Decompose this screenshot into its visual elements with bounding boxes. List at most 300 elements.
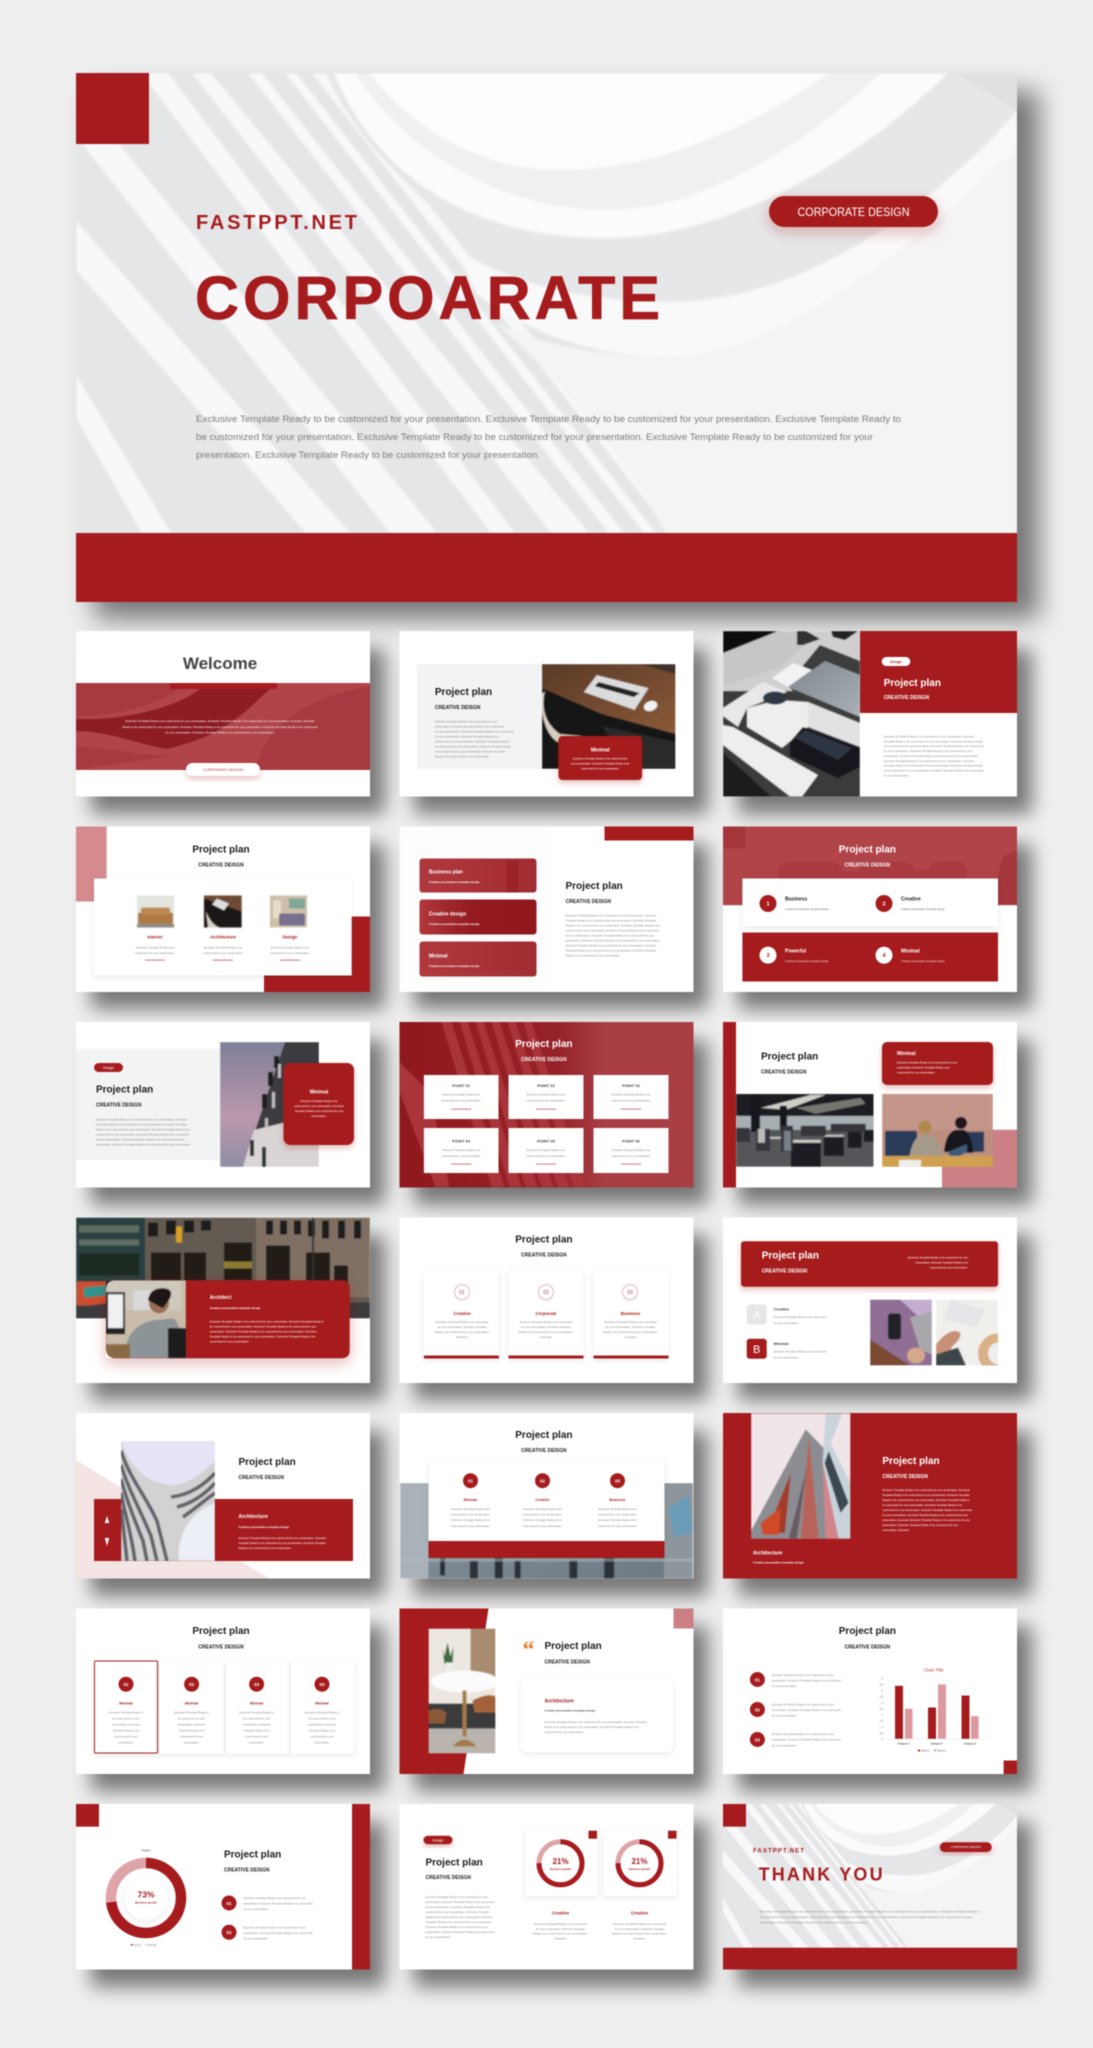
heading [426, 1857, 483, 1881]
pill button [769, 196, 938, 227]
grey panel [417, 664, 542, 769]
body text: Exclusive Template Ready to be customized for your presentation. Exclusive [96, 1118, 187, 1122]
grey panel [76, 1049, 220, 1160]
item 3 [760, 947, 829, 964]
slide: project plan with laptop photo [399, 630, 694, 798]
column: business: Exclusive Template Ready to be customized [604, 1320, 657, 1324]
column: architecture [203, 934, 243, 961]
donut chart: 2nd Qtr [148, 1944, 157, 1947]
red card [742, 932, 998, 982]
caption 2: Exclusive [634, 1937, 646, 1941]
column: minimal [451, 1473, 491, 1528]
card 01: presentation. [118, 1740, 134, 1744]
point 03: POINT 03 [622, 1083, 641, 1088]
heading: Project plan [426, 1857, 483, 1868]
body text: to be customized for your presentation. Exclusive Template Ready to be customized [884, 744, 984, 748]
caption [753, 1551, 804, 1564]
heading: Project plan [96, 1085, 153, 1096]
category labels: Category 3 [964, 1742, 977, 1746]
body text: Template Ready to be customized for your presentation. Exclusive Template [882, 1493, 970, 1497]
card 01: be customized for your [112, 1716, 140, 1720]
point 03: customized for your presentation. [611, 1098, 651, 1102]
bar chart: 0 [882, 1738, 884, 1741]
red side bar [723, 1022, 736, 1188]
column: corporate: for your presentation. Exclusive Template [521, 1325, 571, 1329]
photo band [76, 683, 370, 770]
body text: Template Ready to be customized for your presentation. Exclusive Template [566, 948, 656, 952]
brand label: FASTPPT.NET [196, 212, 357, 234]
item 2: Creative presentation template design [901, 907, 945, 911]
heading [96, 1085, 153, 1109]
description text [760, 1910, 980, 1925]
body text: Ready to be customized for your presentation. Exclusive [426, 1915, 493, 1919]
slide: three circles over glass building [399, 1412, 694, 1579]
column: business: Exclusive [625, 1335, 637, 1339]
photo: two women meeting [881, 1093, 994, 1168]
thumbnail slide shadows [91, 649, 1032, 1987]
body text [884, 734, 984, 778]
body text: be customized for your presentation. Exclusive Template Ready [435, 744, 511, 748]
card: business plan: Business plan [429, 870, 463, 876]
heading [435, 687, 492, 711]
arrows [105, 1516, 109, 1546]
bar chart: 2 [882, 1714, 884, 1717]
point 05: POINT 05 [537, 1138, 556, 1144]
callout card: customized for your presentation. [897, 1070, 936, 1074]
card 03: Template Ready to be [244, 1728, 270, 1732]
red banner: Project plan [762, 1250, 819, 1262]
slide: welcome [75, 630, 371, 798]
heading: Project plan [884, 678, 941, 689]
description text: presentation. Exclusive Template Ready to be customized for your presentation. [196, 450, 540, 461]
photo: curved building [120, 1441, 216, 1562]
heading: CREATIVE DEISGN [566, 899, 611, 905]
heading [839, 844, 896, 868]
callout card: Exclusive Template Ready to be [301, 1099, 338, 1103]
point 06 [594, 1128, 668, 1173]
card: business plan: Creative presentation template design [429, 880, 480, 884]
heading [192, 1626, 250, 1650]
slide: project plan with devices photo [722, 630, 1018, 798]
heading: CREATIVE DEISGN [238, 1475, 284, 1481]
band text: Architecture [238, 1514, 268, 1520]
column: creative: customized for your presentation. [523, 1524, 563, 1528]
card 03: be customized for your [243, 1716, 270, 1720]
photo: devices flat lay [722, 630, 861, 798]
item b: Exclusive Template Ready to be customized [774, 1349, 827, 1353]
main title: CORPOARATE [195, 264, 660, 332]
tag pill [94, 1063, 123, 1072]
red tab [170, 683, 277, 689]
body text: Exclusive Template Ready to be customized for your [435, 720, 497, 724]
white card [742, 878, 998, 926]
tag pill: Design [890, 660, 902, 664]
series 1 bars [895, 1686, 970, 1739]
body text: customized for your presentation. Exclusive Template Ready to be customized [882, 1508, 973, 1512]
description text: Exclusive Template Ready to be customized for your presentation. Exclusive Template Ready to be customized for your presentation. Exclusive Template Ready to [760, 1910, 980, 1914]
bar chart: Chart Title [924, 1668, 944, 1672]
photo: laptop and coffee [869, 1299, 932, 1366]
body text: presentation. Exclusive Template Ready to be customized [426, 1930, 495, 1934]
column: business: Ready to be customized for your presentation. [603, 1330, 658, 1334]
point 01 [424, 1075, 498, 1119]
heading [884, 678, 941, 701]
card 04: presentation. Exclusive [308, 1722, 336, 1726]
slide: red with tower photo [722, 1412, 1018, 1580]
body text: presentation. Exclusive [882, 1528, 910, 1532]
column: interior: customized for your presentation. [135, 951, 175, 955]
card: creative design [420, 900, 536, 934]
tag pill [424, 1836, 452, 1844]
white card [94, 878, 352, 976]
welcome text: Ready to be customized for your presentation. Exclusive Template Ready to be customized for your presentation. Exclusive Template Ready to be customized [122, 725, 318, 729]
donut chart: 73% [137, 1890, 155, 1900]
item 1: Creative presentation template design [785, 907, 829, 911]
item b: for your presentation. [774, 1356, 799, 1360]
caption 2: Creative [631, 1910, 649, 1915]
welcome text: Exclusive Template Ready to be customized for your presentation. Exclusive Template Ready to be customized for your presentation. Exclusive Template [125, 719, 315, 723]
body text: presentation. Exclusive Template Ready to be customized for your presentation. [96, 1142, 191, 1146]
red card with photo: Template Ready to be customized for your presentation. Exclusive Template Ready to be [210, 1334, 316, 1338]
item 2 [876, 895, 945, 912]
point 02: 02 [226, 1930, 232, 1935]
caption 2 [612, 1910, 667, 1941]
bar chart [880, 1668, 988, 1752]
column: creative: Exclusive [456, 1335, 468, 1339]
pink corner block [942, 1130, 1017, 1188]
bar chart: 4 [882, 1690, 884, 1692]
column: business [598, 1473, 638, 1528]
point 01: for your presentation. [244, 1907, 269, 1911]
heading: CREATIVE DEISGN [96, 1103, 142, 1109]
column: architecture: Exclusive Template Ready to be [204, 946, 243, 950]
column: design: customized for your presentation. [270, 951, 310, 955]
card: minimal: Creative presentation template design [429, 964, 480, 968]
body text [566, 914, 661, 958]
item a: A [753, 1310, 761, 1322]
photo: table and chairs [428, 1628, 496, 1754]
card: minimal [420, 942, 536, 976]
heading [515, 1234, 573, 1258]
white card: Creative presentation template design [544, 1708, 595, 1712]
slide: office photos [722, 1021, 1018, 1188]
item 4: Creative presentation template design [901, 959, 945, 963]
point 05: Exclusive Template Ready to be [527, 1148, 566, 1152]
white card: Ready to be customized for your presentation. Exclusive Template Ready to be [544, 1725, 639, 1729]
point 03: 03 [755, 1737, 760, 1742]
point 06: Exclusive Template Ready to be [612, 1148, 651, 1152]
card 03: presentation. [249, 1740, 265, 1744]
heading: Project plan [761, 1052, 818, 1063]
point 01: 01 [226, 1901, 232, 1906]
body text: for your presentation. Exclusive Template Ready to be customized for your [566, 934, 654, 938]
point 01: for your presentation. [772, 1684, 797, 1688]
point 03: for your presentation. [772, 1743, 797, 1747]
card 02: Exclusive Template Ready to [174, 1710, 209, 1714]
column: corporate: Ready to be customized for your presentation. [519, 1330, 574, 1334]
heading: Project plan [839, 1626, 896, 1637]
card 01: Template Ready to be [113, 1728, 140, 1732]
category labels: Category 1 [897, 1742, 910, 1746]
white card [428, 1460, 664, 1541]
item 2: Creative [901, 896, 921, 902]
slide: building photo with card [76, 1022, 371, 1188]
point 04: Exclusive Template Ready to be [442, 1148, 481, 1152]
card 03: customized for your [245, 1734, 268, 1738]
point 02 [222, 1925, 313, 1941]
red card with photo: customized for your presentation. [210, 1340, 250, 1344]
red panel [860, 631, 1017, 713]
body text: for your presentation. Exclusive Template Ready to be customized for your [882, 1513, 968, 1517]
point 04: customized for your presentation. [441, 1154, 481, 1158]
slide: quote with table photo [398, 1608, 694, 1775]
caption 1: Creative [552, 1910, 570, 1915]
card: donut 1: 21% [552, 1857, 569, 1866]
card: donut 2 [604, 1831, 676, 1896]
point 02: Exclusive Template Ready to be customized for your [772, 1702, 834, 1706]
column: corporate: Corporate [536, 1311, 557, 1316]
caption: Architecture [753, 1551, 783, 1557]
body text: Exclusive Template Ready to be customized for your [426, 1895, 488, 1899]
heading: CREATIVE DEISGN [198, 862, 244, 868]
red card with photo: Creative presentation template design [210, 1306, 261, 1310]
card 04: customized for your [310, 1734, 334, 1738]
body text: for your presentation. Exclusive Template Ready to be customized for your [96, 1138, 185, 1142]
pill button: CORPORATE DESIGN [951, 1845, 981, 1849]
callout card: customized for your presentation. [581, 767, 620, 771]
heading: CREATIVE DEISGN [845, 862, 891, 868]
column: business: Business [621, 1311, 641, 1316]
red banner: customized for your presentation. [930, 1266, 968, 1270]
heading [192, 844, 250, 868]
legend: Series 2 [937, 1750, 946, 1752]
caption 1: for your presentation. Exclusive Template [536, 1927, 586, 1931]
body text [435, 720, 514, 758]
point 01: Exclusive Template Ready to be customized for your [244, 1896, 306, 1900]
caption 2: Exclusive Template Ready to be customized [613, 1922, 666, 1926]
heading [515, 1039, 573, 1063]
slide: red banner with a/b items [722, 1217, 1018, 1384]
body text: for your presentation. Exclusive Template Ready to be customized [435, 730, 514, 734]
title: Welcome [183, 654, 257, 673]
body text: be customized for your presentation. Exclusive Template Ready to be [882, 1503, 962, 1507]
welcome text [122, 719, 318, 734]
body text: for your presentation. [426, 1935, 451, 1939]
red corner [723, 1804, 746, 1827]
body text: Ready to be customized for your presentation. [435, 754, 490, 758]
white card [520, 1678, 674, 1752]
card 02: Minimal [185, 1702, 198, 1706]
slide: architecture building photo [76, 1412, 371, 1580]
bar chart: 0.5 [880, 1732, 884, 1735]
body text: Exclusive Template Ready to be customized for your presentation. Exclusive [566, 944, 657, 948]
body text: Template Ready to be customized for your presentation. Exclusive Template Ready [884, 739, 983, 743]
column: creative: Creative [453, 1311, 471, 1316]
column: design: Design [283, 934, 298, 940]
heading: CREATIVE DEISGN [435, 705, 481, 711]
callout card: Exclusive Template Ready to be customized for [573, 757, 628, 761]
photo: sofa [137, 896, 174, 928]
red shape [400, 1608, 488, 1774]
column: business: customized for your presentation. [598, 1513, 638, 1517]
column: minimal: customized for your presentation. [451, 1513, 491, 1517]
item 1 [760, 895, 829, 912]
left shaded panel [400, 826, 550, 992]
red background with stripes [400, 1022, 694, 1188]
heading [566, 881, 623, 905]
body text: Ready to be customized for your presentation. Exclusive Template Ready to be [96, 1128, 190, 1132]
point 02: presentation. Exclusive Template Ready to be customized [772, 1708, 841, 1712]
point 03 [750, 1732, 841, 1747]
category labels: Category 2 [931, 1742, 944, 1746]
caption 2: for your presentation. Exclusive Template [615, 1927, 665, 1931]
heading [544, 1641, 602, 1666]
point 02 [508, 1075, 584, 1119]
heading: Project plan [515, 1039, 573, 1050]
body text: presentation. Exclusive Template Ready to be customized for your [882, 1523, 958, 1527]
red card with photo: Exclusive Template Ready to be customized for your presentation. Exclusive Template Ready to [210, 1320, 324, 1324]
slide: six point grid [398, 1021, 694, 1188]
legend [918, 1750, 946, 1752]
photo: man at desk [105, 1280, 187, 1359]
card 04: presentation. [314, 1740, 330, 1744]
item 3: 3 [766, 953, 770, 959]
heading: Project plan [839, 844, 896, 856]
brand label: FASTPPT.NET [753, 1848, 804, 1855]
column: minimal: Minimal [464, 1498, 477, 1502]
tag pill [882, 657, 910, 666]
card: donut 1: Business growth [550, 1867, 571, 1871]
card 01 [94, 1661, 158, 1753]
card 04 [291, 1660, 354, 1754]
heading [761, 1052, 818, 1076]
point 01: customized for your presentation. [441, 1098, 481, 1102]
card 02: be customized for your [178, 1716, 205, 1720]
body text: Exclusive Template Ready to be customized for your [426, 1925, 488, 1929]
body text: Template Ready to be customized for your presentation. Exclusive Template [96, 1122, 187, 1126]
caption 2: Ready to be customized for your presentation. [612, 1932, 667, 1936]
column: corporate: Exclusive Template Ready to be customized [520, 1320, 573, 1324]
card: creative design: Creative presentation template design [429, 922, 480, 926]
body text: Ready to be customized for your presentation. Exclusive Template Ready to be [566, 924, 660, 928]
band text: Exclusive Template Ready to be customized for your presentation. Exclusive [238, 1536, 327, 1540]
card: donut 2: 21% [631, 1857, 648, 1866]
bar chart: 5 [882, 1678, 884, 1680]
footer bar [76, 533, 1017, 602]
heading: Project plan [192, 1626, 250, 1637]
red background [723, 1413, 1017, 1578]
body text [96, 1118, 191, 1146]
card 03: Exclusive Template Ready to [239, 1710, 274, 1714]
column: creative [424, 1272, 499, 1358]
column: business: Exclusive Template Ready to be [598, 1507, 637, 1511]
description text: Exclusive Template Ready to be customized for your presentation. Exclusive Template Ready to be customized for your presentation. Exclusive Template Ready to [196, 414, 901, 425]
column: business: Business [610, 1498, 625, 1502]
bar chart: 3 [882, 1702, 884, 1705]
body text: for your presentation. Exclusive Template Ready to be customized for your [884, 749, 972, 753]
card 02: presentation. Exclusive [178, 1722, 206, 1726]
callout card: customized for your presentation. Exclusive [294, 1104, 345, 1108]
column: business: for your presentation. Exclusive Template [606, 1325, 656, 1329]
point 01: Exclusive Template Ready to be customized for your [772, 1673, 834, 1677]
callout card: presentation. [312, 1114, 327, 1118]
body text: customized for your presentation. Exclusive Template Ready to [435, 740, 510, 744]
point 01 [750, 1672, 841, 1688]
photo: interior [270, 896, 307, 928]
bar chart: 4.5 [880, 1684, 884, 1686]
callout card: Minimal [897, 1051, 916, 1057]
card 03: presentation. Exclusive [243, 1722, 271, 1726]
red corner [1004, 1760, 1017, 1774]
item a [747, 1304, 827, 1325]
closing title: THANK YOU [759, 1864, 883, 1884]
body text: for your presentation. Exclusive Template Ready to be [426, 1905, 490, 1909]
pink corner bar [76, 826, 107, 902]
photo: hands and hat [935, 1300, 999, 1366]
column: creative: 02 [540, 1478, 545, 1484]
card 04: Template Ready to be [309, 1728, 336, 1732]
body text: presentation. Exclusive Template Ready to be customized for your presentation. [884, 754, 979, 758]
card 02: Template Ready to be [179, 1728, 205, 1732]
card 01: Exclusive Template Ready to [109, 1710, 144, 1714]
white card: Architecture [544, 1698, 574, 1704]
footer bar [723, 1948, 1017, 1970]
item a: Exclusive Template Ready to be customized [774, 1315, 827, 1319]
heading: Project plan [435, 687, 492, 698]
description text: be customized for your presentation. Exclusive Template Ready to be customized for your presentation. Exclusive Template Ready to be customized for your [196, 432, 874, 443]
description text: presentation. Exclusive Template Ready to be customized for your presentation. [760, 1921, 868, 1925]
item b: B [753, 1344, 760, 1356]
point 01: Exclusive Template Ready to be [442, 1092, 481, 1096]
point 06: POINT 06 [622, 1138, 641, 1144]
heading [238, 1457, 296, 1481]
bar chart: 2.5 [880, 1708, 884, 1711]
column: creative: for your presentation. Exclusive Template [437, 1325, 487, 1329]
heading: CREATIVE DEISGN [426, 1875, 471, 1881]
description text: be customized for your presentation. Exclusive Template Ready to be customized for your presentation. Exclusive Template Ready to be customized for your [760, 1915, 972, 1919]
red side bar [352, 1804, 370, 1970]
point 02: 02 [755, 1707, 760, 1712]
heading: CREATIVE DEISGN [521, 1252, 567, 1258]
bar chart: 3.5 [880, 1696, 884, 1699]
card: minimal: Minimal [429, 954, 448, 960]
point 03: Exclusive Template Ready to be customized for your [772, 1732, 834, 1736]
red top tab [604, 826, 694, 840]
body text: customized for your presentation. Exclusive Template [426, 1910, 489, 1914]
category labels [897, 1742, 977, 1746]
heading: CREATIVE DEISGN [882, 1474, 928, 1480]
heading: Project plan [192, 844, 250, 856]
red banner: presentation. Exclusive Template Ready to be [915, 1260, 969, 1264]
column: corporate: Exclusive [540, 1335, 552, 1339]
red banner: CREATIVE DEISGN [762, 1268, 808, 1274]
band text: Template Ready to be customized for your presentation. Exclusive Template [238, 1541, 326, 1545]
card: business plan [420, 858, 536, 892]
welcome text: for your presentation. Exclusive Template Ready to be customized for your presentation. [165, 730, 275, 734]
body text: Exclusive Template Ready to be customized for your presentation. Exclusive [884, 759, 975, 763]
photo: laptop on desk [541, 663, 676, 770]
legend: Series 1 [921, 1750, 930, 1752]
column: minimal: Exclusive Template Ready to be [451, 1507, 490, 1511]
body text: presentation. Exclusive Template Ready to be customized [426, 1900, 495, 1904]
point 01: POINT 01 [452, 1083, 471, 1088]
card 03: 03 [254, 1682, 260, 1687]
heading: Project plan [882, 1456, 940, 1467]
callout card: Exclusive Template Ready to be customized for your [897, 1060, 957, 1064]
body text: presentation. Exclusive Template Ready to be customized for your presentation. [566, 938, 661, 942]
point 02: Exclusive Template Ready to be [527, 1092, 566, 1096]
point 01: 01 [755, 1677, 760, 1682]
